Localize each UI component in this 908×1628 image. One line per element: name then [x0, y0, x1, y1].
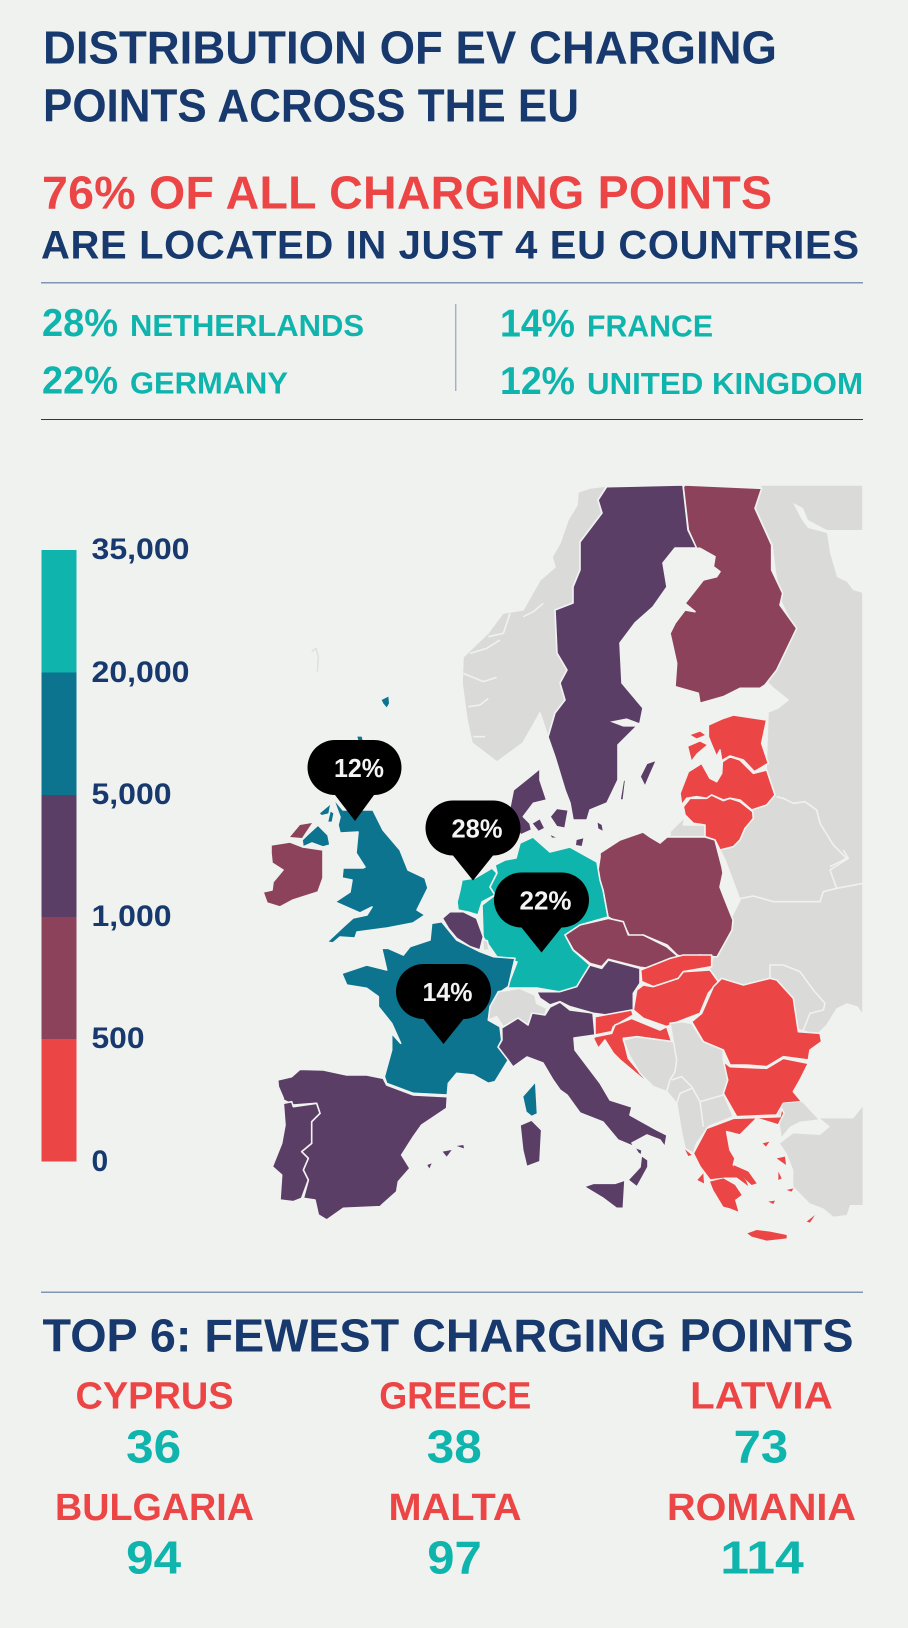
legend colour scale: 0 [92, 1145, 108, 1178]
fewest list: Bulgaria: 94 [126, 1532, 181, 1584]
fewest list: Malta: 97 [427, 1532, 482, 1584]
Luxembourg [483, 940, 489, 951]
pin: France 14% [396, 964, 491, 1044]
pin: United Kingdom 12% [308, 740, 401, 821]
Faroe Islands [312, 648, 318, 672]
top four countries: GERMANY [130, 366, 288, 400]
title: DISTRIBUTION OF EV CHARGING [43, 22, 777, 74]
top four countries: UNITED KINGDOM [587, 366, 863, 401]
fewest list: Latvia: LATVIA [690, 1376, 833, 1418]
fewest list: Greece [379, 1376, 531, 1473]
Sweden [548, 485, 697, 820]
fewest list: Bulgaria [55, 1487, 254, 1584]
pin: United Kingdom 12%: 12% [334, 753, 384, 783]
fewest list: Latvia [690, 1376, 833, 1473]
heading: fewest charging points: TOP 6: FEWEST CHARGING POINTS [42, 1310, 854, 1362]
legend colour scale: 500 [92, 1022, 144, 1055]
Estonia [688, 715, 768, 772]
fewest list: Cyprus: CYPRUS [76, 1376, 234, 1418]
pin: Germany 22%: 22% [520, 886, 572, 916]
legend colour scale: 5,000 [92, 778, 172, 811]
fewest list: Malta [388, 1487, 522, 1584]
legend colour scale: 35,000 [92, 533, 190, 566]
title: POINTS ACROSS THE EU [43, 80, 579, 132]
Finland [670, 485, 797, 703]
top four countries: 12% [500, 360, 575, 403]
fewest list: Bulgaria: BULGARIA [55, 1487, 254, 1529]
fewest list: Greece: 38 [427, 1421, 482, 1473]
Slovakia [641, 955, 712, 987]
fewest list: Cyprus [76, 1376, 234, 1473]
Czech Republic [565, 918, 678, 968]
fewest list: Latvia: 73 [734, 1421, 788, 1473]
pin: Netherlands 28%: 28% [452, 814, 502, 844]
legend colour scale: 20,000 [92, 656, 190, 689]
top four countries [42, 302, 863, 403]
fewest list: Malta: MALTA [388, 1487, 522, 1529]
Poland [597, 832, 733, 957]
non-EU Balkans [623, 1022, 733, 1153]
top four countries: NETHERLANDS [130, 308, 364, 343]
legend colour scale [42, 533, 190, 1178]
Portugal [272, 1102, 320, 1202]
non-EU east: Russia, Belarus, Ukraine [670, 485, 863, 1035]
headline statistic: 76% OF ALL CHARGING POINTS [42, 166, 772, 218]
Romania [692, 978, 822, 1067]
Norway [462, 486, 607, 762]
top four countries: 28% [42, 302, 118, 345]
France [342, 922, 537, 1116]
United Kingdom [302, 697, 428, 943]
headline statistic: ARE LOCATED IN JUST 4 EU COUNTRIES [41, 224, 859, 268]
pin: Germany 22% [494, 872, 589, 952]
Belgium [442, 912, 483, 950]
legend colour scale: 1,000 [92, 900, 172, 933]
top four countries: FRANCE [587, 308, 713, 344]
Slovenia [595, 1010, 633, 1035]
Italy [498, 1002, 667, 1208]
fewest list: Romania: ROMANIA [667, 1487, 856, 1529]
Germany [482, 837, 608, 992]
top four countries: 22% [42, 360, 118, 402]
map of Europe [263, 485, 863, 1241]
Bulgaria [722, 1058, 808, 1117]
fewest list: Cyprus: 36 [126, 1421, 181, 1473]
fewest list: Romania: 114 [720, 1532, 804, 1584]
Netherlands [457, 868, 497, 915]
Latvia [680, 757, 775, 810]
Lithuania [683, 795, 753, 850]
Denmark [510, 768, 603, 846]
pin: France 14%: 14% [422, 977, 472, 1007]
Hungary [633, 970, 718, 1027]
Turkey [778, 1102, 863, 1217]
Austria [537, 960, 640, 1015]
fewest list: Romania [667, 1487, 856, 1584]
pin: Netherlands 28% [426, 800, 520, 880]
Spain [278, 1069, 464, 1220]
Ireland [263, 823, 323, 907]
Switzerland [488, 988, 547, 1027]
title [43, 22, 777, 132]
Croatia [593, 1018, 672, 1085]
top four countries: 14% [500, 302, 575, 346]
fewest list: Greece: GREECE [379, 1376, 531, 1418]
Greece [685, 1108, 815, 1241]
headline statistic [41, 166, 859, 268]
